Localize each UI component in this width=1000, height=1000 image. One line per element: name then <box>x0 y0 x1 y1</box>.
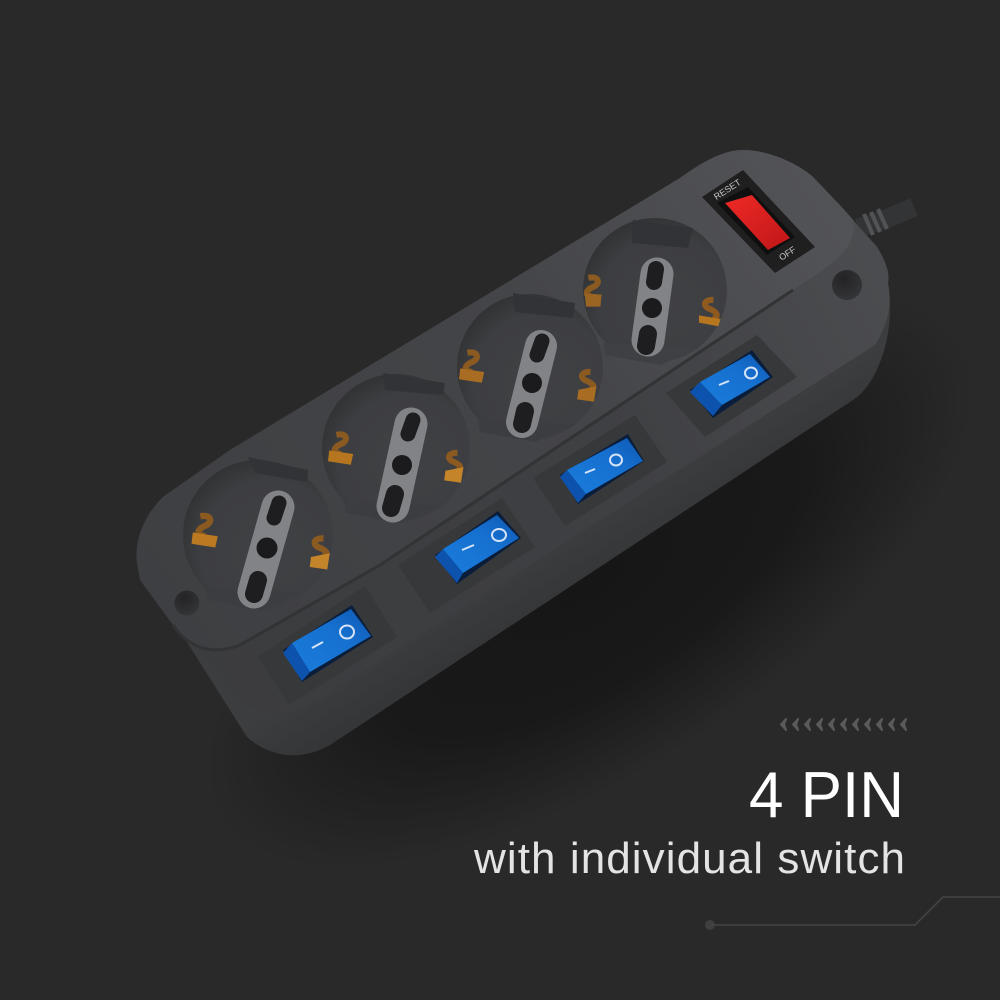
symbols <box>312 642 323 648</box>
strip top face <box>137 150 889 712</box>
symbols <box>719 381 729 385</box>
bezel <box>666 335 797 437</box>
power strip <box>137 150 914 755</box>
hole centre 1 <box>256 538 278 558</box>
rocker <box>567 438 643 494</box>
contact right 1 <box>310 538 330 570</box>
symbols <box>462 545 474 550</box>
rocker <box>292 609 371 672</box>
rocker side <box>283 643 310 681</box>
socket 3 <box>457 293 603 442</box>
rocker side <box>560 470 586 503</box>
title: 4 PIN <box>749 758 904 831</box>
rocker side <box>435 549 463 583</box>
subtitle: with individual switch <box>473 834 905 883</box>
power switch <box>702 170 815 273</box>
hole top 3 <box>537 341 542 355</box>
pin plate 4 <box>648 274 657 340</box>
contact right 2 <box>444 453 463 483</box>
mount hole left <box>174 590 200 616</box>
keyway 4 <box>632 220 693 248</box>
lower flat 1 <box>206 588 303 610</box>
label reset: RESET <box>712 177 743 202</box>
pin plate 2 <box>393 424 411 506</box>
hole top 4 <box>654 269 656 282</box>
hole top 1 <box>274 503 279 518</box>
plate ridge shading <box>173 290 793 650</box>
lower flat 4 <box>603 343 700 365</box>
pin plate 1 <box>254 507 278 592</box>
contact right 3 <box>577 372 596 402</box>
blue switch 1 <box>258 586 397 705</box>
recess 2 <box>322 374 470 522</box>
chevron row <box>781 719 906 730</box>
recess 4 <box>583 218 727 362</box>
hole bottom 1 <box>254 580 258 594</box>
contact left 3 <box>459 352 484 383</box>
contact left 1 <box>192 516 218 548</box>
hole bottom 3 <box>522 411 525 424</box>
well <box>690 350 773 418</box>
well <box>435 511 521 584</box>
bezel <box>258 586 397 705</box>
socket 2 <box>322 373 470 523</box>
hole centre 3 <box>522 373 542 393</box>
lower flat 2 <box>344 501 441 523</box>
recess 1 <box>183 460 333 610</box>
pin plate 3 <box>522 346 541 422</box>
hole bottom 4 <box>646 334 648 346</box>
hole centre 4 <box>642 298 662 318</box>
keyway 1 <box>248 457 308 482</box>
blue switch 3 <box>533 415 667 526</box>
socket 4 <box>583 218 727 365</box>
bezel <box>702 170 815 273</box>
recess 3 <box>457 294 603 440</box>
power cord <box>858 207 914 235</box>
rocker side <box>690 382 722 416</box>
keyway 3 <box>513 293 575 318</box>
mount hole right <box>832 270 862 300</box>
socket 1 <box>183 457 333 610</box>
blue switch 4 <box>666 335 797 437</box>
contact right 4 <box>699 300 721 326</box>
keyway 2 <box>383 373 445 395</box>
rocker frame <box>717 187 795 255</box>
circuit line decoration <box>705 897 1000 930</box>
red rocker <box>725 195 790 250</box>
hole bottom 2 <box>391 494 395 508</box>
strip body side <box>137 150 890 755</box>
hole top 2 <box>408 420 413 434</box>
rocker <box>700 354 770 405</box>
lower flat 3 <box>478 420 575 442</box>
well <box>283 605 373 682</box>
bezel <box>533 415 667 526</box>
symbols <box>585 469 595 473</box>
raised socket plate <box>137 150 854 650</box>
contact left 2 <box>328 434 353 465</box>
rocker <box>443 515 519 573</box>
label off: OFF <box>777 244 798 263</box>
strip drop shadow <box>118 181 1000 979</box>
bezel <box>398 498 535 613</box>
contact left 4 <box>585 277 602 307</box>
hole centre 2 <box>392 455 412 475</box>
blue switch 2 <box>398 498 535 613</box>
well <box>560 434 644 504</box>
